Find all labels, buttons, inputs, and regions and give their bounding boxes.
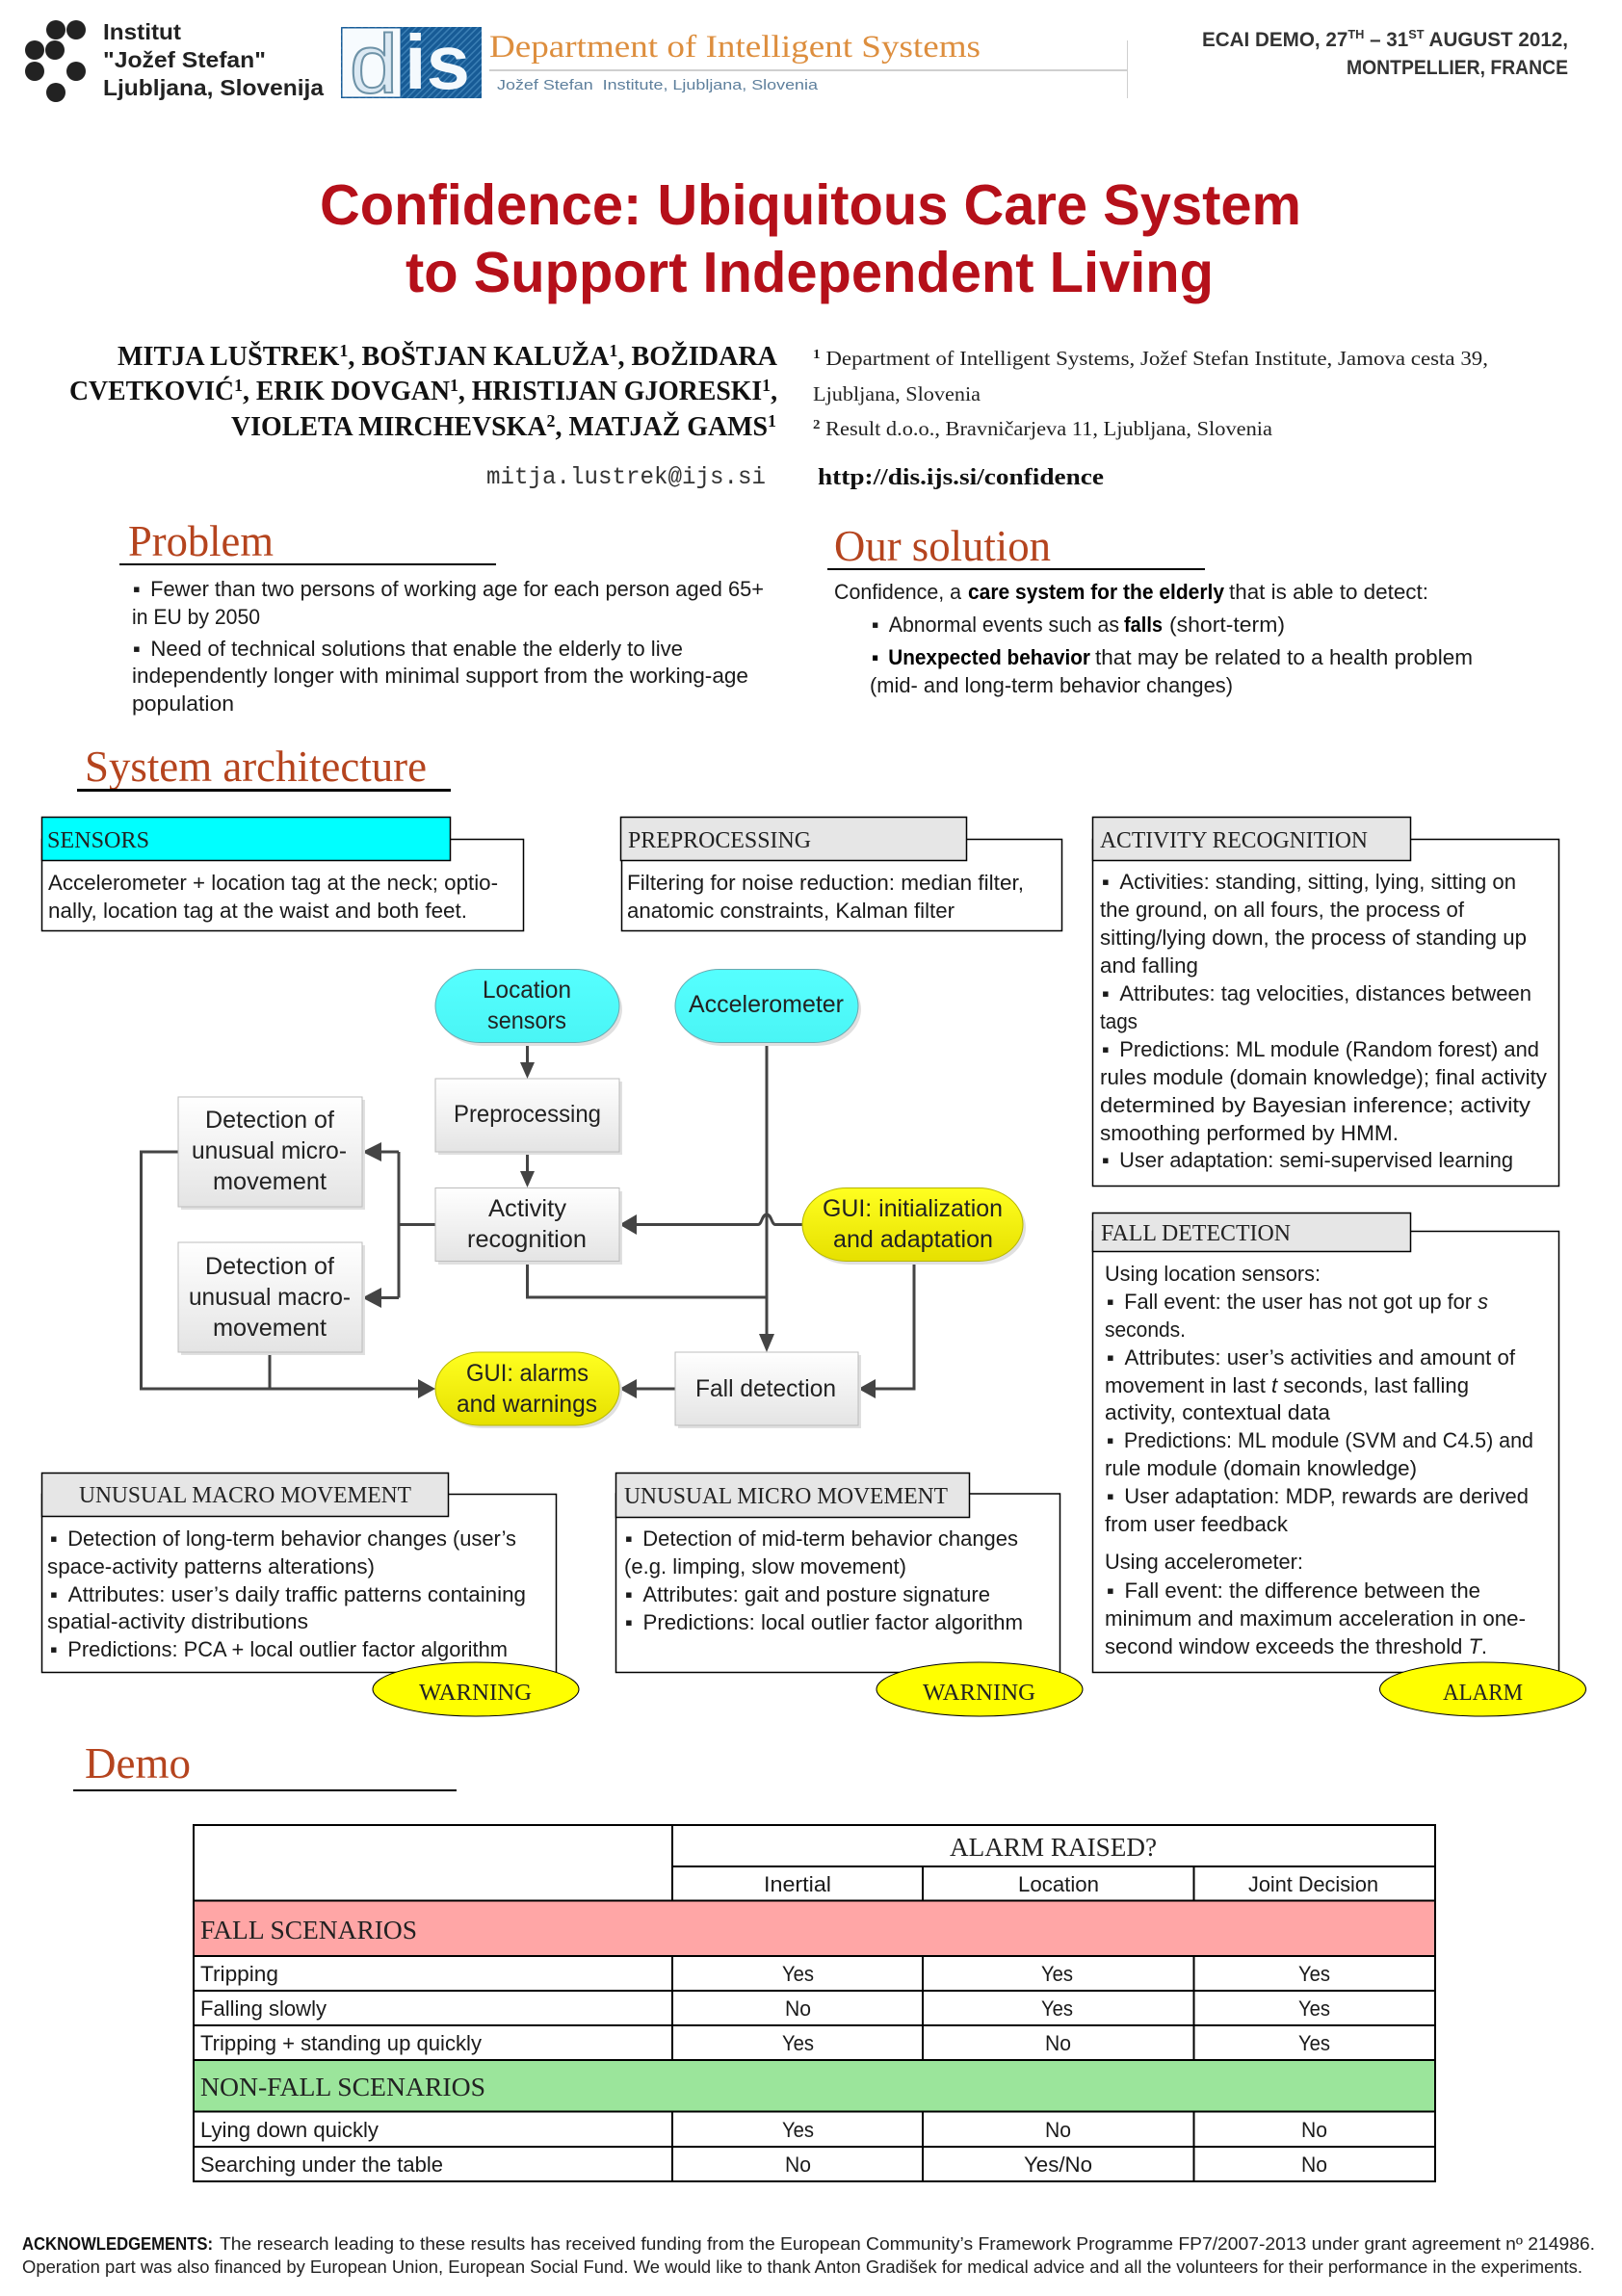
affiliations: Department of Intelligent Systems, Jožef Stefan Institute, Jamova cesta 39, xyxy=(821,347,1488,370)
badge: warning micro xyxy=(876,1662,1083,1716)
affiliations: 1 xyxy=(813,348,821,362)
acknowledgements xyxy=(22,2234,1595,2277)
panel: fall detection: ▪ Fall event: the user has not got up for s xyxy=(1107,1290,1488,1314)
heading: Our solution: Our solution xyxy=(834,522,1051,570)
logo: Institut Jozef Stefan: "Jožef Stefan" xyxy=(103,47,266,72)
panel: unusual macro movement: spatial-activity distributions xyxy=(47,1609,308,1633)
panel: preprocessing: Filtering for noise reduction: median filter, xyxy=(627,871,1024,895)
project url: http://dis.ijs.si/confidence xyxy=(818,465,1104,490)
panel: preprocessing: PREPROCESSING xyxy=(628,828,811,853)
row: falling slowly: Yes xyxy=(1041,1996,1073,2021)
panel: fall detection: seconds. xyxy=(1105,1318,1186,1342)
authors: 1 xyxy=(609,341,617,360)
conference info: MONTPELLIER, FRANCE xyxy=(1347,57,1568,79)
affiliations: Ljubljana, Slovenia xyxy=(813,382,981,405)
panel: activity recognition: ▪ User adaptation: semi-supervised learning xyxy=(1102,1148,1513,1172)
connector lines xyxy=(141,1042,914,1389)
table header: Location xyxy=(1018,1872,1099,1896)
authors: 1 xyxy=(339,341,348,360)
affiliations: 2 xyxy=(813,418,820,432)
conference info: TH xyxy=(1347,27,1364,41)
node: detection of unusual macro-movement: unusual macro- xyxy=(189,1284,351,1311)
acknowledgements: Operation part was also financed by European Union, European Social Fund. We would like to thank Anton Gradišek for medical advice and all the volunteers for their performance in the experiments. xyxy=(22,2257,1583,2277)
title xyxy=(320,173,1301,304)
row: tripping + standing up quickly: Yes xyxy=(1298,2031,1330,2055)
panel: unusual micro movement: ▪ Detection of mid-term behavior changes xyxy=(625,1526,1018,1551)
panel: unusual micro movement: ▪ Attributes: gait and posture signature xyxy=(625,1582,990,1606)
logo: Department of Intelligent Systems: Jožef Stefan Institute, Ljubljana, Slovenia xyxy=(497,77,819,93)
panel: unusual macro movement: UNUSUAL MACRO MOVEMENT xyxy=(79,1483,411,1508)
panel: fall detection: rule module (domain knowledge) xyxy=(1105,1456,1417,1480)
text block: solution: Confidence, a xyxy=(834,580,962,604)
node: accelerometer xyxy=(675,969,861,1046)
panel: activity recognition: tags xyxy=(1100,1009,1138,1033)
panel: unusual macro movement xyxy=(42,1474,557,1672)
node: activity recognition xyxy=(435,1188,622,1265)
panel: fall detection: ▪ Fall event: the difference between the xyxy=(1107,1578,1480,1603)
node: detection of unusual micro-movement: movement xyxy=(213,1168,327,1195)
acknowledgements: ACKNOWLEDGEMENTS: xyxy=(22,2234,213,2254)
badge: warning macro xyxy=(373,1662,579,1716)
node: fall detection xyxy=(675,1352,861,1428)
text block: problem bullets xyxy=(132,577,764,716)
authors: , HRISTIJAN GJORESKI xyxy=(458,377,762,406)
panel: unusual macro movement: space-activity patterns alterations) xyxy=(47,1554,375,1578)
panel: fall detection: ▪ Predictions: ML module (SVM and C4.5) and xyxy=(1107,1428,1533,1452)
row: tripping: Yes xyxy=(782,1962,814,1986)
table: alarm raised xyxy=(194,1825,1435,2181)
panel: activity recognition: the ground, on all fours, the process of xyxy=(1100,898,1465,922)
text block: problem bullets: ▪ Fewer than two persons of working age for each person aged 65+ xyxy=(133,577,764,601)
node: accelerometer: Accelerometer xyxy=(689,991,844,1018)
authors: 1 xyxy=(450,376,458,395)
node: detection of unusual micro-movement: unusual micro- xyxy=(192,1137,347,1164)
panel: activity recognition xyxy=(1092,817,1558,1187)
row: searching under the table: No xyxy=(1301,2152,1327,2177)
logo: Department of Intelligent Systems: d xyxy=(350,18,398,111)
author email: mitja.lustrek@ijs.si xyxy=(486,463,766,491)
panel: activity recognition: and falling xyxy=(1100,953,1198,978)
table grid xyxy=(194,1825,1435,2181)
node: GUI initialization and adaptation: GUI: initialization xyxy=(823,1195,1003,1222)
row: tripping: Yes xyxy=(1298,1962,1330,1986)
text block: solution: (mid- and long-term behavior changes) xyxy=(870,673,1233,697)
panel: activity recognition: ▪ Predictions: ML module (Random forest) and xyxy=(1102,1037,1539,1061)
logo: Institut Jozef Stefan: Ljubljana, Slovenija xyxy=(103,75,324,100)
text block: solution xyxy=(834,580,1473,697)
node: GUI alarms and warnings: GUI: alarms xyxy=(466,1360,589,1387)
row: tripping + standing up quickly: No xyxy=(1045,2031,1071,2055)
node: location sensors: Location xyxy=(483,977,571,1004)
badge: warning macro: WARNING xyxy=(419,1681,532,1706)
section: fall scenarios: FALL SCENARIOS xyxy=(200,1916,417,1944)
node: detection of unusual macro-movement: Detection of xyxy=(205,1253,334,1280)
logo: Institut Jozef Stefan: Institut xyxy=(103,19,181,44)
panel: fall detection: minimum and maximum acceleration in one- xyxy=(1105,1606,1526,1631)
panel: unusual macro movement: ▪ Detection of long-term behavior changes (user’s xyxy=(50,1526,516,1551)
row: lying down quickly xyxy=(200,2118,1327,2142)
row: lying down quickly: No xyxy=(1045,2118,1071,2142)
conference info: – 31 xyxy=(1364,29,1409,51)
panel: fall detection xyxy=(1092,1213,1558,1672)
text block: solution: care system for the elderly xyxy=(968,580,1225,604)
panel: unusual micro movement xyxy=(616,1474,1060,1672)
node: preprocessing xyxy=(435,1079,622,1155)
badge: alarm xyxy=(1379,1662,1585,1716)
row: tripping + standing up quickly: Yes xyxy=(782,2031,814,2055)
panel: activity recognition: ACTIVITY RECOGNITION xyxy=(1100,828,1368,853)
panel: fall detection: ▪ Attributes: user’s activities and amount of xyxy=(1107,1345,1516,1370)
row: tripping: Yes xyxy=(1041,1962,1073,1986)
text block: solution: that may be related to a health problem xyxy=(1095,645,1473,669)
node: detection of unusual micro-movement: Detection of xyxy=(205,1107,334,1134)
authors xyxy=(69,341,778,442)
row fill: fall scenarios xyxy=(194,1900,1435,1956)
panel: fall detection: Using location sensors: xyxy=(1105,1262,1321,1286)
logo: Department of Intelligent Systems: is xyxy=(405,19,470,105)
panel: activity recognition: ▪ Activities: standing, sitting, lying, sitting on xyxy=(1102,870,1516,894)
panel: fall detection: ▪ User adaptation: MDP, rewards are derived xyxy=(1107,1484,1529,1508)
text block: problem bullets: independently longer with minimal support from the working-age xyxy=(132,664,748,688)
conference info: ST xyxy=(1408,27,1425,41)
row: searching under the table: Searching under the table xyxy=(200,2152,443,2177)
row: falling slowly xyxy=(200,1996,1330,2021)
panel: unusual macro movement: ▪ Attributes: user’s daily traffic patterns containing xyxy=(50,1582,526,1606)
panel: preprocessing xyxy=(620,817,1061,930)
authors: , BOŠTJAN KALUŽA xyxy=(348,342,610,372)
row: searching under the table: No xyxy=(785,2152,811,2177)
authors: 1 xyxy=(234,376,243,395)
table header: Inertial xyxy=(764,1872,831,1896)
row: tripping + standing up quickly xyxy=(200,2031,1330,2055)
row: lying down quickly: No xyxy=(1301,2118,1327,2142)
row: tripping + standing up quickly: Tripping + standing up quickly xyxy=(200,2031,482,2055)
badge: alarm: ALARM xyxy=(1443,1681,1523,1706)
row: tripping: Tripping xyxy=(200,1962,278,1986)
text block: solution: ▪ Abnormal events such as xyxy=(872,613,1119,637)
panel: preprocessing: anatomic constraints, Kalman filter xyxy=(627,899,955,923)
table header: ALARM RAISED? xyxy=(950,1833,1157,1862)
row: lying down quickly: Yes xyxy=(782,2118,814,2142)
node: detection of unusual micro-movement xyxy=(178,1097,365,1210)
row: lying down quickly: Lying down quickly xyxy=(200,2118,379,2142)
text block: solution: (short-term) xyxy=(1169,613,1285,637)
authors: , ERIK DOVGAN xyxy=(243,377,450,406)
panel: fall detection: activity, contextual data xyxy=(1105,1400,1331,1424)
panel: activity recognition: ▪ Attributes: tag velocities, distances between xyxy=(1102,981,1531,1005)
title: to Support Independent Living xyxy=(406,241,1214,304)
authors: CVETKOVIĆ xyxy=(69,377,236,406)
row: searching under the table xyxy=(200,2152,1327,2177)
heading: Demo: Demo xyxy=(85,1739,191,1787)
authors: , BOŽIDARA xyxy=(617,342,778,372)
node: detection of unusual macro-movement: movement xyxy=(213,1315,327,1342)
node: GUI initialization and adaptation xyxy=(802,1188,1026,1265)
table header: Joint Decision xyxy=(1248,1872,1378,1896)
text block: solution: ▪ Unexpected behavior xyxy=(872,645,1090,669)
text block: solution: falls xyxy=(1124,613,1163,637)
arrowheads xyxy=(362,1062,876,1398)
node: GUI alarms and warnings: and warnings xyxy=(457,1391,597,1418)
node: activity recognition: Activity xyxy=(488,1195,566,1222)
node: location sensors xyxy=(435,969,622,1046)
authors: , MATJAŽ GAMS xyxy=(556,412,768,442)
panel: unusual micro movement: UNUSUAL MICRO MOVEMENT xyxy=(624,1484,948,1509)
node: preprocessing: Preprocessing xyxy=(454,1101,601,1128)
row: searching under the table: Yes/No xyxy=(1024,2152,1092,2177)
title: Confidence: Ubiquitous Care System xyxy=(320,173,1301,237)
panel: unusual micro movement: ▪ Predictions: local outlier factor algorithm xyxy=(625,1610,1023,1634)
text block: solution: that is able to detect: xyxy=(1229,580,1428,604)
panel: fall detection: from user feedback xyxy=(1105,1512,1289,1536)
affiliations xyxy=(813,347,1488,440)
row: falling slowly: No xyxy=(785,1996,811,2021)
panel: fall detection: movement in last t seconds, last falling xyxy=(1105,1373,1469,1397)
panel: activity recognition: determined by Bayesian inference; activity xyxy=(1100,1093,1530,1117)
row fill: non-fall scenarios xyxy=(194,2060,1435,2111)
panel: sensors xyxy=(42,817,524,930)
table header xyxy=(764,1833,1378,1896)
panel: activity recognition: rules module (domain knowledge); final activity xyxy=(1100,1065,1547,1089)
panel: activity recognition: sitting/lying down, the process of standing up xyxy=(1100,926,1527,950)
authors: 1 xyxy=(762,376,771,395)
node: GUI alarms and warnings xyxy=(435,1352,622,1428)
panel: fall detection: FALL DETECTION xyxy=(1101,1221,1291,1246)
badge: warning micro: WARNING xyxy=(923,1681,1035,1706)
panel: sensors: Accelerometer + location tag at the neck; optio- xyxy=(48,871,498,895)
section: non-fall scenarios: NON-FALL SCENARIOS xyxy=(200,2073,485,2101)
affiliations: Result d.o.o., Bravničarjeva 11, Ljubljana, Slovenia xyxy=(820,417,1273,440)
authors: VIOLETA MIRCHEVSKA xyxy=(231,412,548,442)
conference info: ECAI DEMO, 27 xyxy=(1202,29,1350,51)
panel: sensors: SENSORS xyxy=(47,828,149,853)
text block: problem bullets: in EU by 2050 xyxy=(132,605,260,629)
authors: 1 xyxy=(768,411,776,430)
panel: unusual micro movement: (e.g. limping, slow movement) xyxy=(624,1554,906,1578)
authors: , xyxy=(771,377,777,406)
panel: fall detection: Using accelerometer: xyxy=(1105,1550,1303,1574)
node: fall detection: Fall detection xyxy=(695,1375,836,1402)
text block: problem bullets: ▪ Need of technical solutions that enable the elderly to live xyxy=(133,637,683,661)
conference info: AUGUST 2012, xyxy=(1425,29,1568,51)
authors: MITJA LUŠTREK xyxy=(118,342,339,372)
logo: Department of Intelligent Systems xyxy=(341,18,1128,111)
panel: unusual macro movement: ▪ Predictions: PCA + local outlier factor algorithm xyxy=(50,1637,508,1661)
panel: fall detection: second window exceeds the threshold T. xyxy=(1105,1634,1487,1658)
text block: problem bullets: population xyxy=(132,691,234,716)
row: tripping xyxy=(200,1962,1330,1986)
logo: Institut Jozef Stefan xyxy=(25,19,324,102)
acknowledgements: The research leading to these results has received funding from the European Community’s Framework Programme FP7/2007-2013 under grant agreement nº 214986. xyxy=(220,2234,1595,2254)
row: falling slowly: Falling slowly xyxy=(200,1996,327,2021)
conference info xyxy=(1202,27,1568,79)
node: location sensors: sensors xyxy=(487,1007,566,1034)
node: GUI initialization and adaptation: and adaptation xyxy=(833,1226,993,1253)
panel: activity recognition: smoothing performed by HMM. xyxy=(1100,1121,1399,1145)
heading: Problem: Problem xyxy=(128,517,274,565)
node: detection of unusual macro-movement xyxy=(178,1242,365,1355)
authors: 2 xyxy=(547,411,556,430)
panel: sensors: nally, location tag at the waist and both feet. xyxy=(48,899,467,923)
row: falling slowly: Yes xyxy=(1298,1996,1330,2021)
node: activity recognition: recognition xyxy=(467,1226,587,1253)
logo: Department of Intelligent Systems: Department of Intelligent Systems xyxy=(489,30,981,65)
heading: System architecture: System architecture xyxy=(85,743,427,791)
flowchart xyxy=(141,969,1026,1428)
